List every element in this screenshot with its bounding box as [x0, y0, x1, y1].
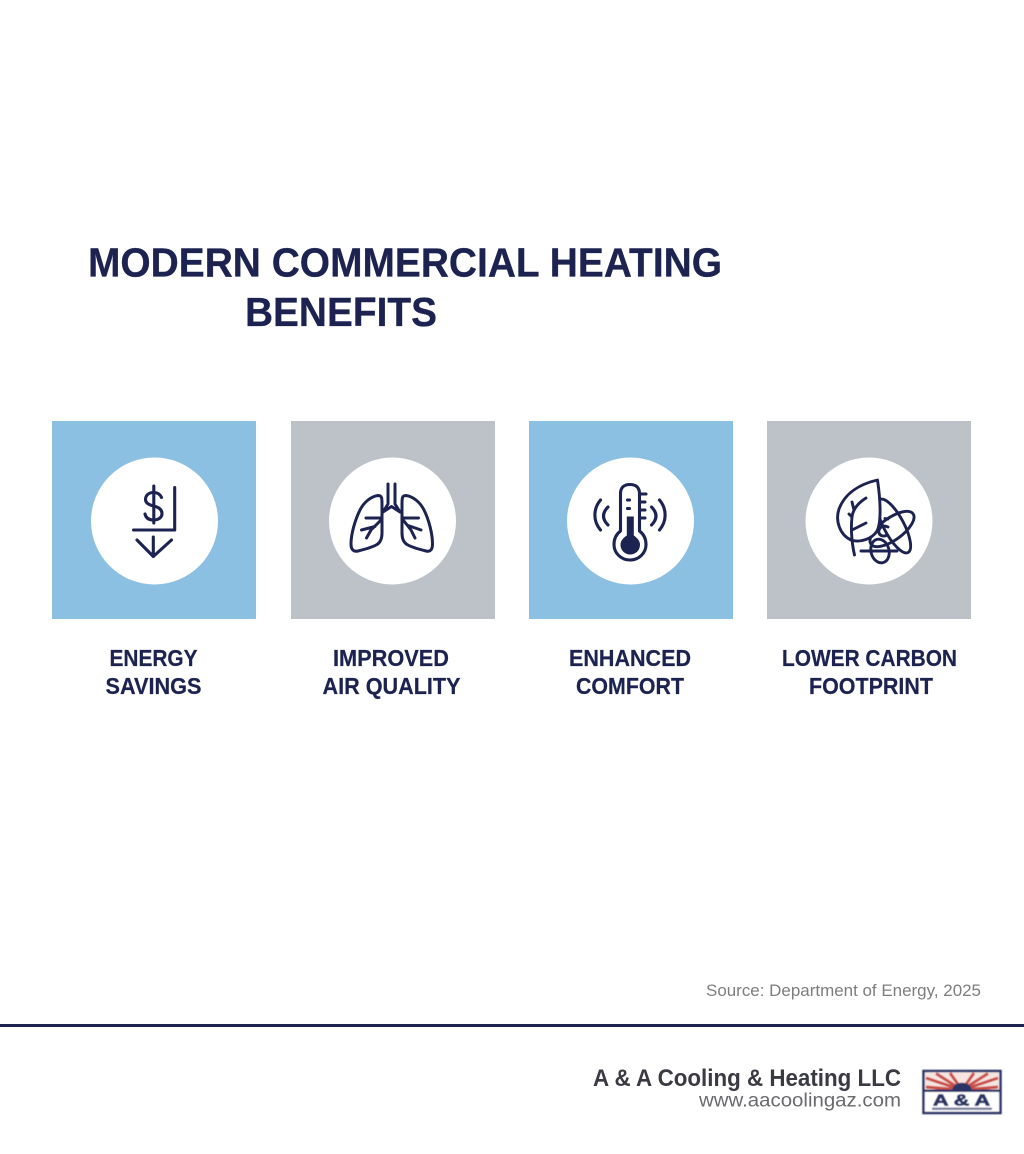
label: energy savings: ENERGY: [110, 645, 198, 671]
title: MODERN COMMERCIAL HEATING: [88, 240, 722, 286]
label: energy savings: SAVINGS: [106, 673, 202, 699]
logo: [924, 1071, 1000, 1113]
label: lower carbon footprint: [782, 645, 957, 699]
panel: lower carbon footprint: [767, 421, 971, 619]
icon: lungs: [351, 484, 432, 551]
label: enhanced comfort: COMFORT: [576, 673, 684, 699]
label: enhanced comfort: [569, 645, 691, 699]
logo: A & A: [933, 1092, 991, 1110]
panel: improved air quality: [291, 421, 495, 619]
label: improved air quality: [322, 645, 460, 699]
website: www.aacoolingaz.com: [698, 1090, 901, 1112]
label: enhanced comfort: ENHANCED: [569, 645, 691, 671]
title: BENEFITS: [245, 289, 437, 335]
label: improved air quality: IMPROVED: [333, 645, 449, 671]
label: improved air quality: AIR QUALITY: [322, 673, 460, 699]
icon: thermometer: [595, 484, 665, 560]
footer divider: [0, 1024, 1024, 1027]
label: lower carbon footprint: LOWER CARBON: [782, 645, 957, 671]
label: lower carbon footprint: FOOTPRINT: [809, 673, 933, 699]
icon: dollar with down arrow: [134, 486, 175, 556]
source note: Source: Department of Energy, 2025: [706, 981, 981, 1000]
panel: energy savings: [52, 421, 256, 619]
label: energy savings: [106, 645, 202, 699]
panel: enhanced comfort: [529, 421, 733, 619]
icon: leaf and atom: [838, 480, 920, 565]
company name: A & A Cooling & Heating LLC: [593, 1065, 901, 1092]
title: [88, 240, 722, 335]
